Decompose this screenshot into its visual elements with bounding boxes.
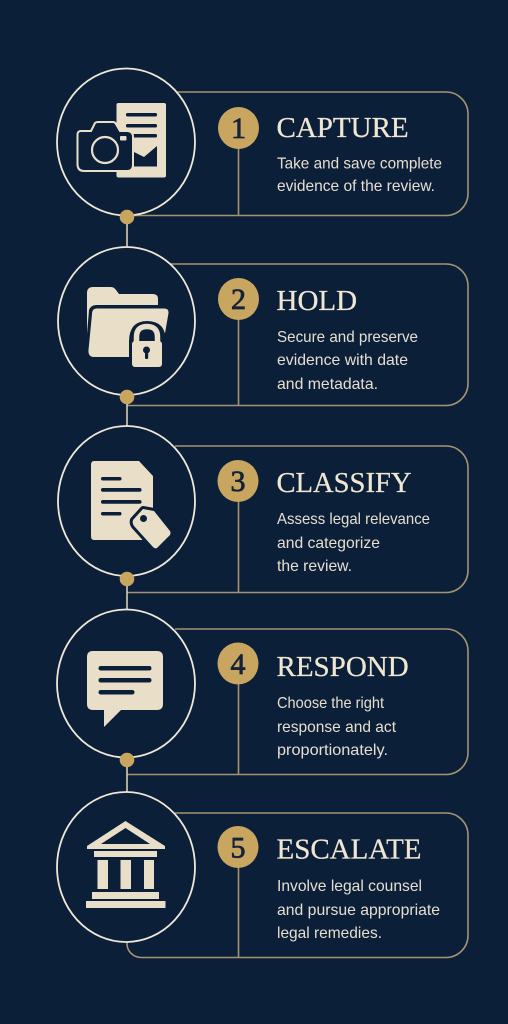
text: capture description xyxy=(277,156,442,195)
badge 1 xyxy=(218,107,259,149)
badge 1: 1 xyxy=(231,112,246,145)
heading: capture: CAPTURE xyxy=(276,112,409,144)
icon: courthouse xyxy=(86,821,166,908)
connector line 4 to 5 xyxy=(126,767,128,792)
ring 4 xyxy=(57,610,195,758)
text: hold description: and metadata. xyxy=(277,376,378,393)
connector 2 xyxy=(238,319,240,406)
connector 4 xyxy=(238,684,240,774)
panel: step 4 respond xyxy=(57,610,468,774)
text: respond description: proportionately. xyxy=(277,742,388,759)
text: capture description: Take and save complete xyxy=(277,156,442,172)
badge 2 xyxy=(218,278,259,320)
text: escalate description xyxy=(277,878,440,942)
card outline 2 xyxy=(127,264,468,406)
text: hold description: Secure and preserve xyxy=(277,329,418,346)
connector 5 xyxy=(238,867,240,958)
text: respond description: Choose the right xyxy=(277,695,385,712)
connector line 1 to 2 xyxy=(126,224,128,247)
text: escalate description: and pursue appropriate xyxy=(277,902,440,919)
text: respond description xyxy=(277,695,397,759)
badge 5 xyxy=(218,826,258,868)
dot 4 xyxy=(120,753,134,767)
connector line 2 to 3 xyxy=(126,404,128,426)
connector line 3 to 4 xyxy=(126,586,128,610)
heading: respond: RESPOND xyxy=(276,651,409,683)
panel: step 2 hold xyxy=(58,247,468,406)
ring 5 xyxy=(57,792,195,942)
card outline 1 xyxy=(127,92,468,216)
card outline 5 xyxy=(127,813,468,958)
badge 5: 5 xyxy=(230,832,246,864)
ring 2 xyxy=(58,247,195,395)
ring 1 xyxy=(57,68,195,216)
text: classify description xyxy=(277,511,430,575)
badge 4 xyxy=(218,642,258,684)
text: respond description: response and act xyxy=(277,719,397,736)
text: escalate description: legal remedies. xyxy=(277,925,382,942)
dot 1 xyxy=(120,210,134,224)
ring 3 xyxy=(58,426,195,576)
panel: step 1 capture xyxy=(57,68,468,224)
text: hold description: evidence with date xyxy=(277,352,408,369)
heading: hold: HOLD xyxy=(276,285,357,317)
text: escalate description: Involve legal counsel xyxy=(277,878,422,895)
panel: step 5 escalate xyxy=(57,792,468,958)
icon: document with tag xyxy=(91,461,170,548)
heading: escalate: ESCALATE xyxy=(276,834,422,866)
icon: camera and document xyxy=(78,103,166,178)
text: hold description xyxy=(277,329,418,393)
badge 4: 4 xyxy=(230,648,246,681)
icon: folder with lock xyxy=(87,287,169,367)
text: classify description: Assess legal relevance xyxy=(277,511,430,528)
heading: classify: CLASSIFY xyxy=(276,467,412,499)
text: classify description: and categorize xyxy=(277,535,380,552)
text: classify description: the review. xyxy=(277,558,352,575)
badge 2: 2 xyxy=(231,283,246,316)
panel: step 3 classify xyxy=(58,426,468,592)
badge 3: 3 xyxy=(230,465,246,498)
badge 3 xyxy=(218,460,258,502)
card outline 4 xyxy=(127,629,468,774)
connector 3 xyxy=(238,500,240,592)
icon: speech bubble xyxy=(87,651,163,727)
dot 2 xyxy=(120,390,134,404)
card outline 3 xyxy=(127,446,468,592)
dot 3 xyxy=(120,572,134,586)
connector 1 xyxy=(238,148,240,216)
text: capture description: evidence of the review. xyxy=(277,178,435,195)
